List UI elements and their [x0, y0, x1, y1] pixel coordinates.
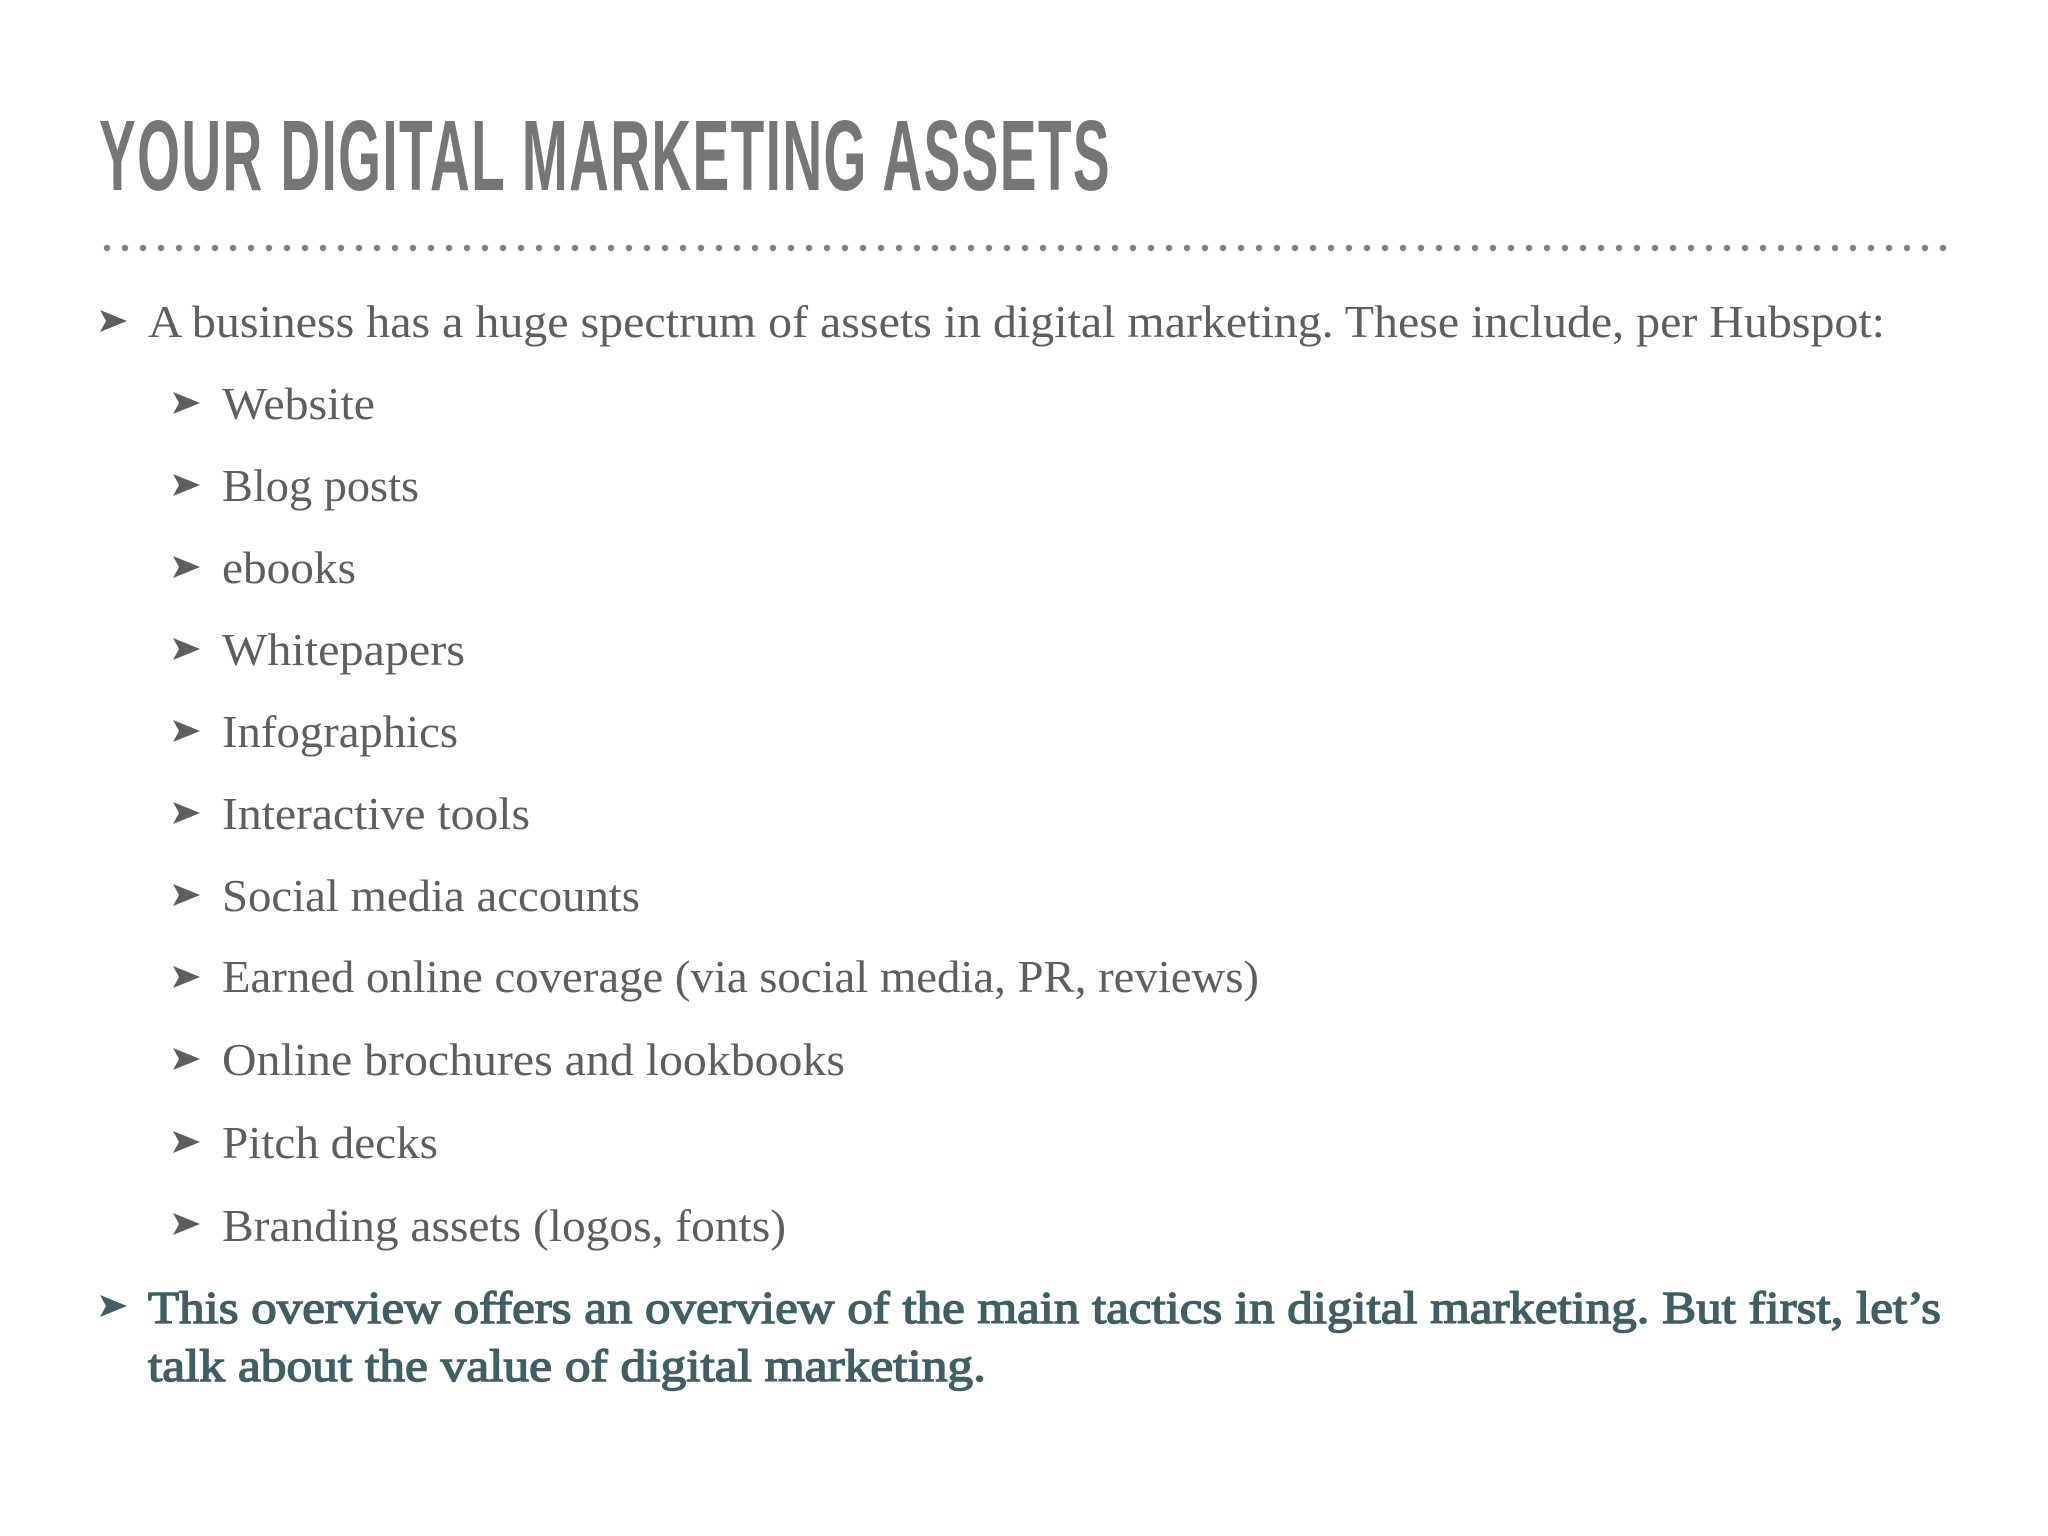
closing callout: talk about the value of digital marketing.	[148, 1340, 986, 1391]
closing callout: This overview offers an overview of the main tactics in digital marketing. But first, let’s	[148, 1282, 1941, 1333]
list item: Whitepapers: Whitepapers	[222, 624, 465, 675]
list item: Website: Website	[222, 378, 375, 429]
list item: Online brochures: Online brochures and lookbooks	[222, 1034, 845, 1085]
title: YOUR DIGITAL MARKETING ASSETS	[99, 100, 1111, 212]
closing callout	[100, 1282, 1941, 1391]
list item: Branding assets: Branding assets (logos, fonts)	[222, 1200, 786, 1251]
list item: ebooks: ebooks	[222, 542, 356, 593]
list item: Blog posts: Blog posts	[222, 460, 419, 511]
list item: Social media accounts: Social media accounts	[222, 870, 640, 921]
list item: Pitch decks: Pitch decks	[222, 1117, 438, 1168]
intro bullet: A business has a huge spectrum of assets in digital marketing. These include, per Hubspot:	[148, 296, 1885, 347]
list item: Infographics: Infographics	[222, 706, 458, 757]
list item: Interactive tools: Interactive tools	[222, 788, 530, 839]
asset list	[173, 378, 1259, 1251]
list item: Earned online coverage: Earned online coverage (via social media, PR, reviews)	[222, 951, 1259, 1002]
